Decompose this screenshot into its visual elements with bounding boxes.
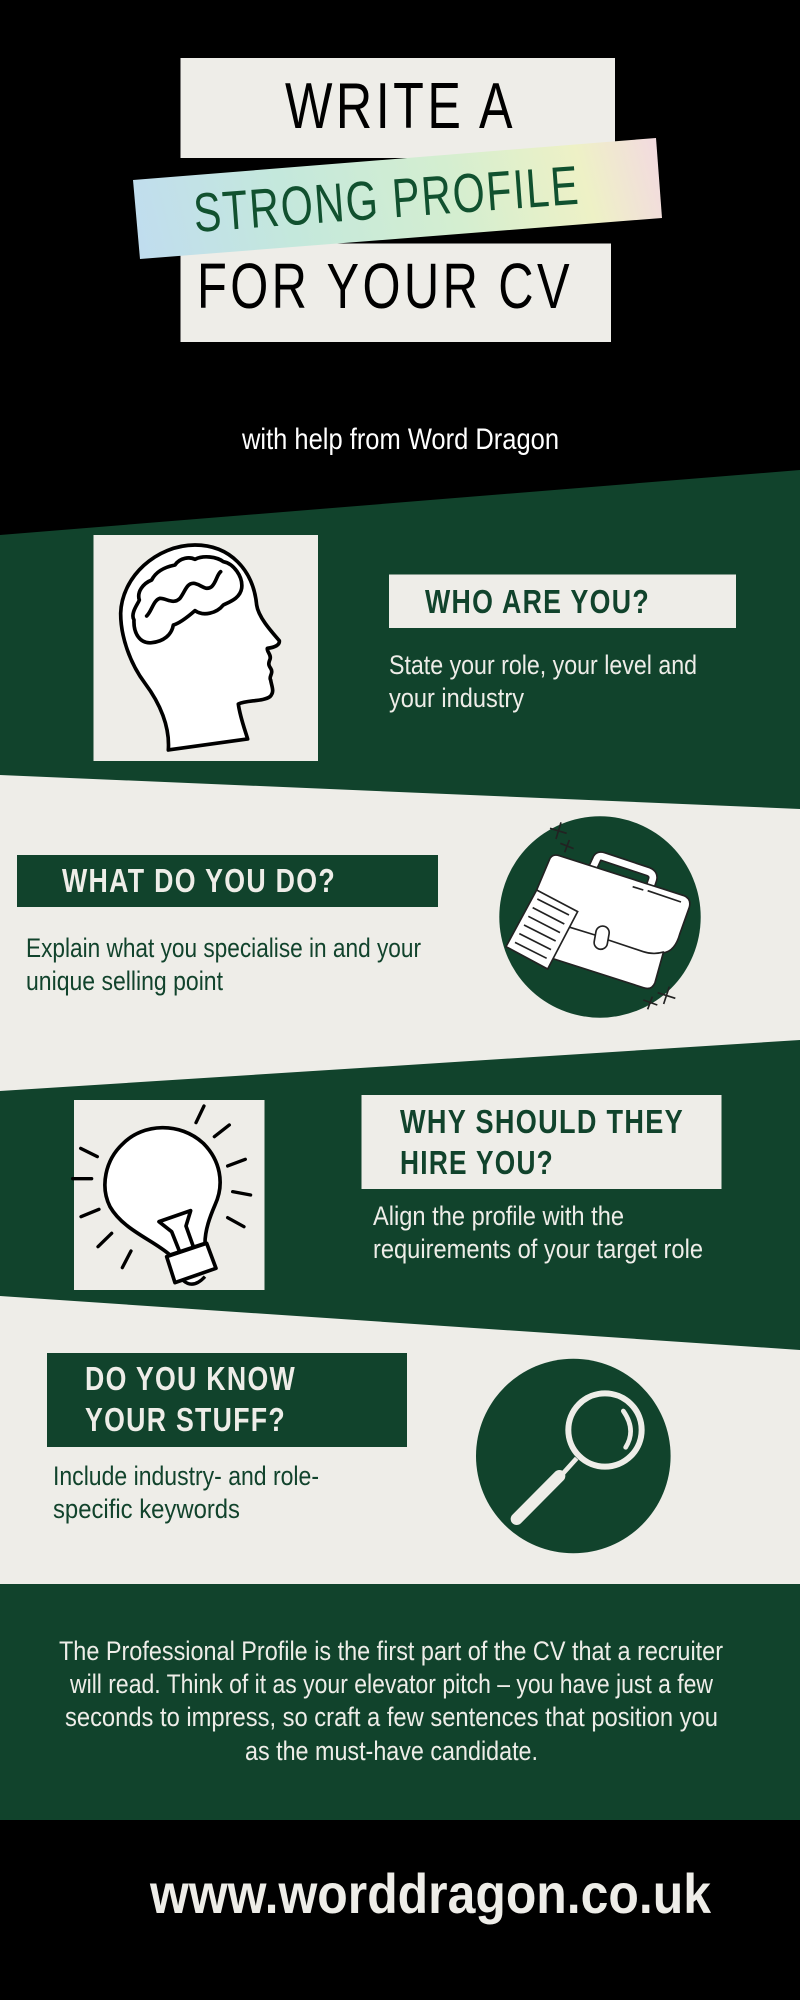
text: what do you do: Explain what you specialise in and your [26,933,421,963]
text: why should they hire you [373,1201,703,1264]
band: green section 3 [0,1040,800,1360]
text: why should they hire you: Align the profile with the [373,1201,624,1231]
text: who are you [389,650,697,713]
text: who are you: State your role, your level and [389,650,697,680]
panel: what do you do [17,816,701,1018]
heading: why should they hire you: WHY SHOULD THEY [400,1103,684,1140]
text: why should they hire you: requirements of your target role [373,1234,703,1264]
text: do you know your stuff: Include industry- and role- [53,1461,319,1491]
summary text: seconds to impress, so craft a few sentences that position you [65,1702,718,1732]
band: green summary section [0,1584,800,1820]
title ribbon: strong profile [133,138,662,259]
panel: do you know your stuff [47,1353,671,1553]
title box: for your cv: FOR YOUR CV [197,250,573,322]
heading: what do you do [17,855,438,907]
title box: write a: WRITE A [285,69,516,142]
icon: magnifying glass [476,1359,671,1553]
subtitle: with help from Word Dragon [241,423,559,456]
text: what do you do [26,933,421,996]
panel: why should they hire you [73,1095,721,1290]
summary text: as the must-have candidate. [245,1736,538,1766]
heading: what do you do: WHAT DO YOU DO? [62,862,336,899]
heading: why should they hire you: HIRE YOU? [400,1144,554,1181]
band: cream section 2 [0,775,800,1100]
icon: briefcase [499,816,701,1018]
summary text [59,1636,723,1766]
band: green section 1 [0,470,800,820]
band: cream section 4 [0,1296,800,1585]
text: do you know your stuff [53,1461,319,1524]
title block [133,58,662,342]
panel: who are you [94,535,736,761]
text: do you know your stuff: specific keywords [53,1494,240,1524]
title ribbon: strong profile: STRONG PROFILE [191,154,582,244]
icon: head with brain [94,535,318,761]
text: who are you: your industry [389,683,524,713]
heading: do you know your stuff: YOUR STUFF? [85,1401,286,1438]
heading: who are you: WHO ARE YOU? [425,583,650,620]
icon: light bulb [73,1100,264,1290]
heading: do you know your stuff [47,1353,407,1447]
heading: why should they hire you [362,1095,722,1189]
heading: do you know your stuff: DO YOU KNOW [85,1360,296,1397]
website url: www.worddragon.co.uk [149,1862,712,1925]
title box: write a [180,58,615,158]
heading: who are you [389,574,736,628]
title box: for your cv [180,244,611,342]
text: what do you do: unique selling point [26,966,223,996]
